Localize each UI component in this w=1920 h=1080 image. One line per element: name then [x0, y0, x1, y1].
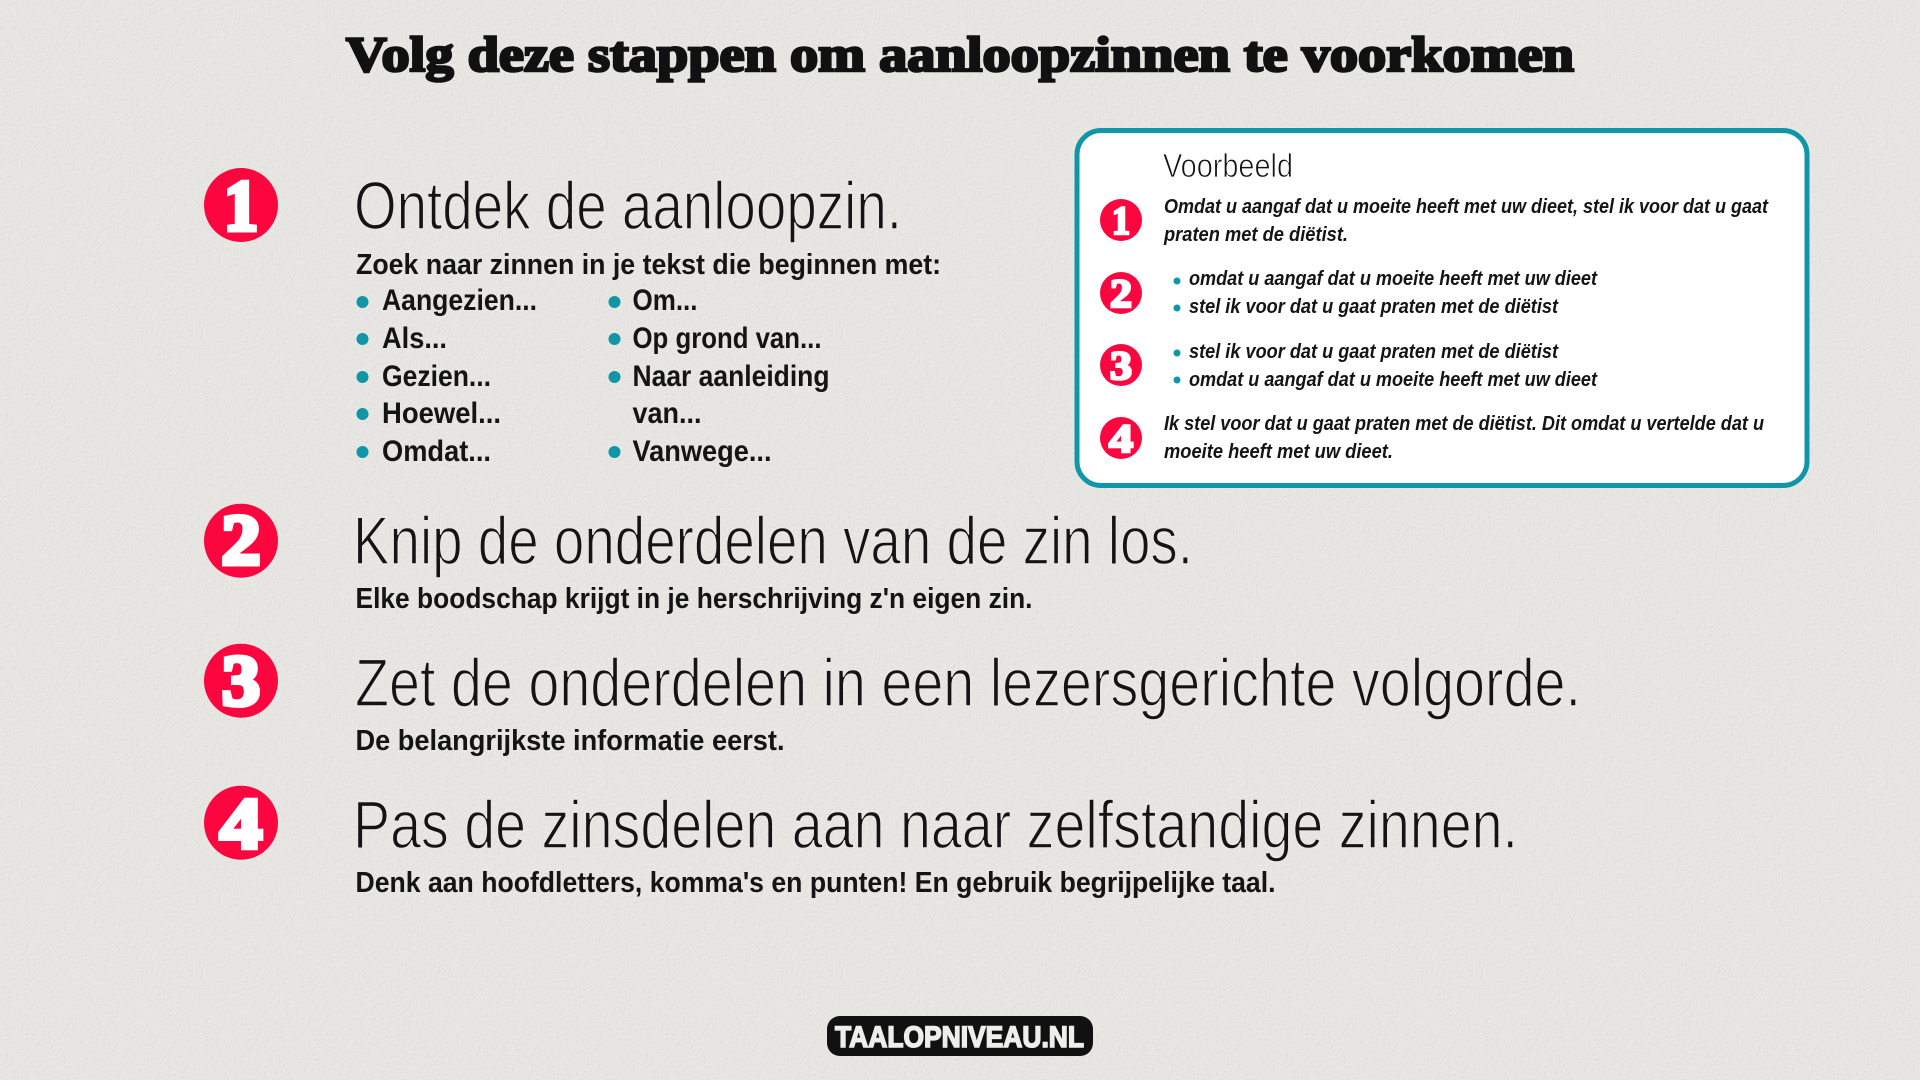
heading: step 1: Ontdek de aanloopzin. — [354, 168, 902, 244]
number badge 2 — [204, 500, 278, 580]
panel heading: Voorbeeld — [1163, 147, 1293, 184]
list: left column — [356, 284, 537, 468]
footer logo: TAALOPNIVEAU.NL — [835, 1021, 1084, 1054]
example 2 — [1100, 268, 1598, 318]
title: Volg deze stappen om aanloopzinnen te voorkomen — [346, 26, 1574, 82]
example 1: Omdat u aangaf dat u moeite heeft met uw dieet, stel ik voor dat u gaat — [1164, 196, 1769, 218]
number badge 2: 2 — [222, 500, 260, 580]
step 3 — [204, 641, 1581, 757]
example 4: 4 — [1109, 416, 1133, 461]
list: right column: Op grond van... — [632, 322, 822, 355]
number badge 1: 1 — [224, 166, 258, 246]
example 4 — [1100, 413, 1764, 463]
example 2: 2 — [1110, 271, 1132, 316]
example 4: moeite heeft met uw dieet. — [1164, 441, 1393, 463]
example 1: 1 — [1112, 198, 1130, 243]
list: right column: van... — [632, 397, 702, 430]
example 1: praten met de diëtist. — [1163, 224, 1348, 246]
list: right column: Vanwege... — [632, 435, 772, 468]
list: right column — [608, 284, 830, 468]
subheading: step 2: Elke boodschap krijgt in je herschrijving z'n eigen zin. — [356, 583, 1032, 615]
example 2: stel ik voor dat u gaat praten met de diëtist — [1189, 296, 1559, 318]
example 2: omdat u aangaf dat u moeite heeft met uw dieet — [1189, 268, 1598, 290]
list: right column: Naar aanleiding — [632, 360, 830, 393]
list: left column: Aangezien... — [382, 284, 537, 317]
list: right column: Om... — [632, 284, 698, 317]
example 3 — [1100, 341, 1598, 391]
subheading: step 1: Zoek naar zinnen in je tekst die beginnen met: — [356, 249, 941, 281]
list: left column: Omdat... — [382, 435, 491, 468]
heading: step 4: Pas de zinsdelen aan naar zelfstandige zinnen. — [353, 787, 1518, 863]
step 2 — [204, 500, 1193, 615]
number badge 3 — [204, 641, 278, 721]
subheading: step 3: De belangrijkste informatie eerst. — [356, 725, 784, 757]
number badge 4: 4 — [220, 784, 262, 864]
example 4: Ik stel voor dat u gaat praten met de diëtist. Dit omdat u vertelde dat u — [1164, 413, 1764, 435]
example 1 — [1100, 196, 1769, 246]
number badge 3: 3 — [222, 641, 260, 721]
panel: voorbeeld — [1077, 130, 1807, 486]
subheading: step 4: Denk aan hoofdletters, komma's en punten! En gebruik begrijpelijke taal. — [356, 867, 1276, 899]
list: left column: Hoewel... — [382, 397, 501, 430]
step 1 — [204, 166, 941, 468]
example 3: stel ik voor dat u gaat praten met de diëtist — [1189, 341, 1559, 363]
list: left column: Gezien... — [382, 360, 491, 393]
panel frame — [1077, 130, 1807, 486]
number badge 4 — [204, 784, 278, 864]
example 3: omdat u aangaf dat u moeite heeft met uw dieet — [1189, 369, 1598, 391]
heading: step 3: Zet de onderdelen in een lezersgerichte volgorde. — [355, 645, 1581, 721]
number badge 1 — [204, 166, 278, 246]
list: left column: Als... — [382, 322, 447, 355]
heading: step 2: Knip de onderdelen van de zin los. — [353, 503, 1193, 579]
step 4 — [204, 784, 1518, 899]
example 3: 3 — [1110, 343, 1132, 388]
